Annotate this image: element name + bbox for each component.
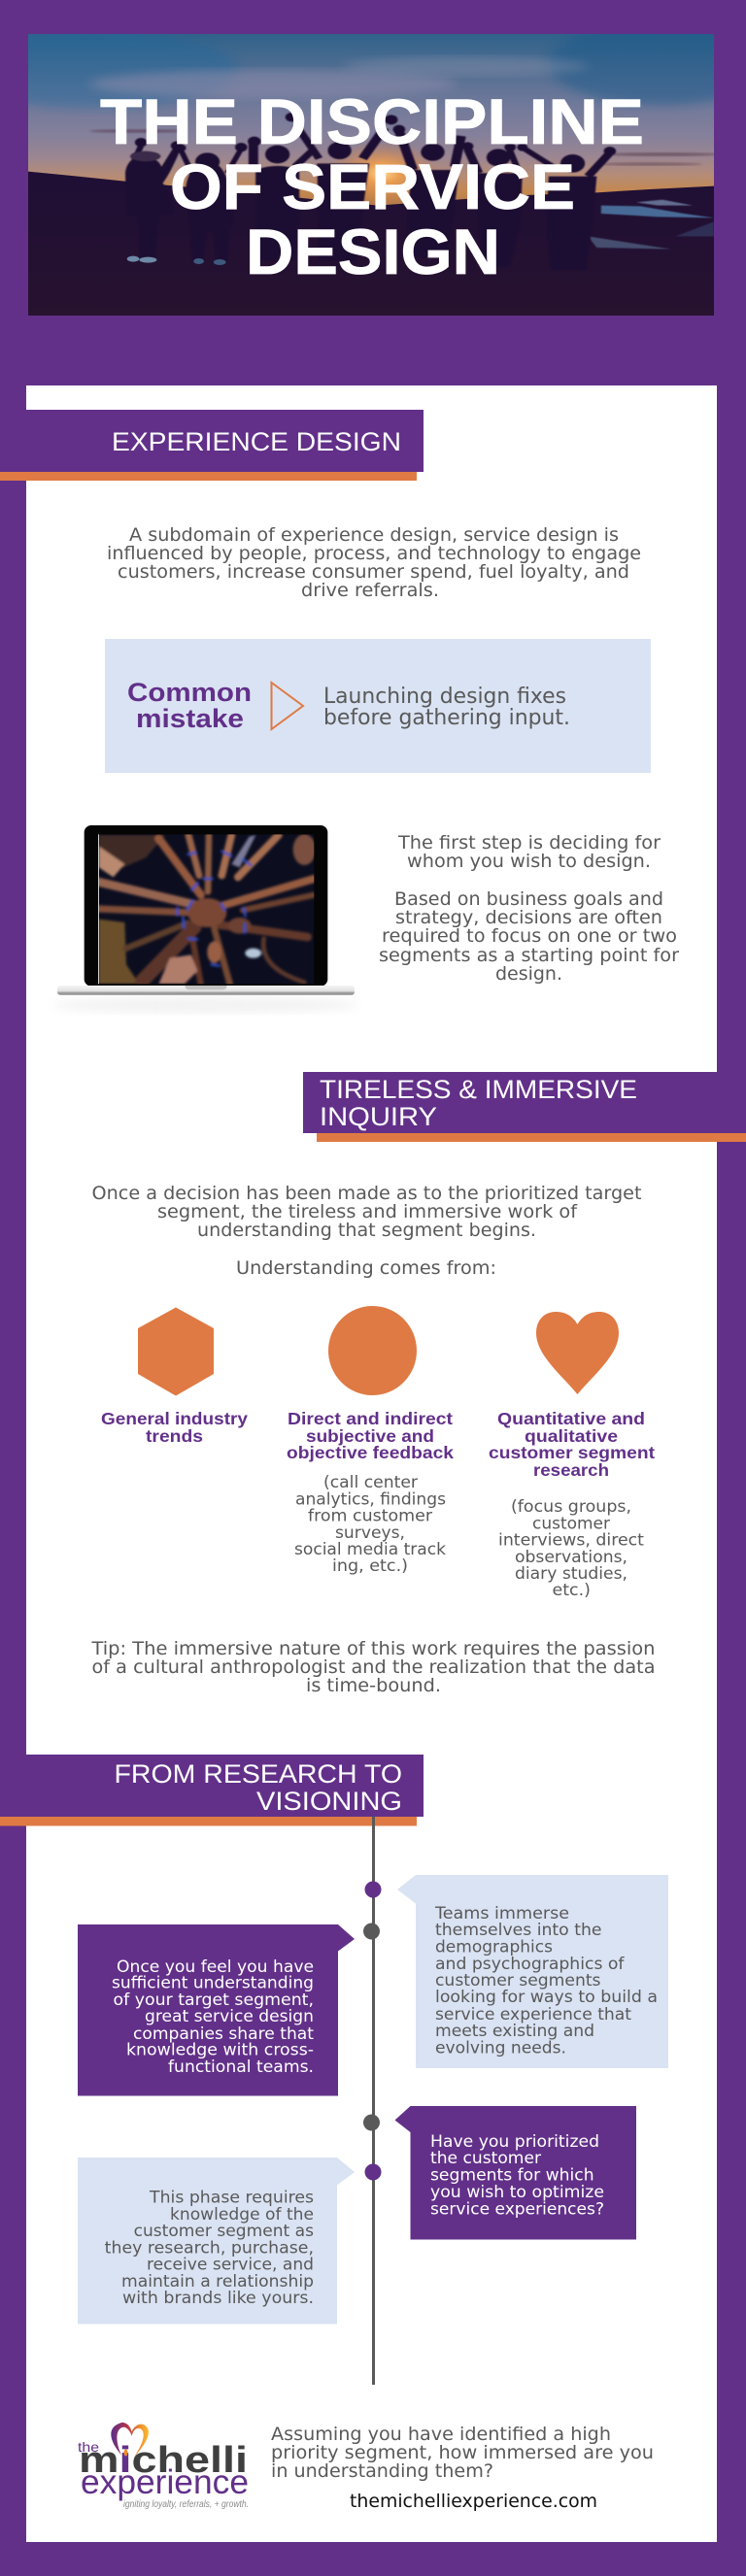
callout: share knowledge: knowledge with cross- [126, 2041, 314, 2060]
callout: teams immerse: Teams immerse [434, 1904, 569, 1924]
panel: hero photo banner [28, 34, 714, 316]
text block: tip [90, 1638, 655, 1696]
callout: prioritized segments question: Have you prioritized [430, 2132, 599, 2152]
text: feedback examples: ing, etc.) [332, 1556, 408, 1576]
logo wordmark: michelli [79, 2440, 248, 2481]
text: feedback examples: social media track [294, 1540, 446, 1559]
label: direct and indirect feedback: objective feedback [287, 1443, 454, 1462]
callout: teams immerse: demographics [435, 1938, 553, 1957]
panel: white content area [26, 385, 717, 2542]
text block: first step: The first step is deciding for [397, 832, 661, 853]
section heading: from research to visioning [0, 1755, 424, 1825]
section heading: from research to visioning: FROM RESEARCH TO [115, 1759, 402, 1789]
callout: prioritized segments question: the customer [430, 2149, 542, 2168]
section heading: tireless and immersive inquiry: TIRELESS & IMMERSIVE [320, 1075, 637, 1104]
text: research examples: customer [532, 1515, 611, 1534]
section heading: tireless and immersive inquiry: INQUIRY [320, 1102, 437, 1131]
text block: first step: design. [495, 963, 562, 985]
callout: share knowledge: sufficient understanding [112, 1973, 314, 1992]
text block: subdomain intro: A subdomain of experience design, service design is [129, 524, 619, 546]
callout: this phase requires: customer segment as [134, 2222, 314, 2241]
callout: teams immerse: service experience that [435, 2005, 631, 2024]
icon: outlined arrow triangle [272, 683, 303, 729]
callout text [323, 685, 570, 730]
text: feedback examples: surveys, [335, 1523, 405, 1543]
column: quantitative and qualitative research [489, 1312, 655, 1600]
label: general industry trends: General industry [101, 1409, 248, 1428]
label: common mistake: mistake [136, 704, 244, 733]
callout: share knowledge: great service design [145, 2007, 314, 2026]
callout: share knowledge: functional teams. [168, 2057, 314, 2077]
panel: common mistake callout [105, 639, 651, 773]
section heading: tireless and immersive inquiry [303, 1072, 746, 1142]
text: research examples [498, 1497, 644, 1600]
text block: first step: required to focus on one or two [382, 925, 677, 947]
logo wordmark: igniting loyalty, referrals, + growth. [123, 2498, 249, 2510]
title: DESIGN [246, 216, 500, 287]
text block: first step: Based on business goals and [394, 888, 663, 910]
callout: this phase requires: they research, purchase, [105, 2239, 314, 2258]
callout: prioritized segments question: service experiences? [430, 2200, 604, 2220]
callout: share knowledge [78, 1924, 355, 2095]
column: general industry trends [101, 1307, 248, 1446]
text block: subdomain intro: drive referrals. [301, 580, 439, 601]
callout: this phase requires: receive service, and [147, 2255, 314, 2274]
section heading: from research to visioning: VISIONING [256, 1787, 402, 1816]
callout: this phase requires [78, 2158, 355, 2325]
title: OF SERVICE [170, 151, 575, 222]
callout: teams immerse: and psychographics of [435, 1955, 625, 1974]
text: feedback examples: analytics, findings [295, 1489, 446, 1509]
callout: prioritized segments question [394, 2106, 636, 2239]
logo wordmark [78, 2439, 249, 2510]
label: quantitative and qualitative research: customer segment [489, 1443, 655, 1462]
icon: heart [536, 1312, 619, 1394]
label: direct and indirect feedback: Direct and indirect [288, 1409, 453, 1428]
label: quantitative and qualitative research: qualitative [525, 1426, 618, 1446]
text: research examples: observations, [515, 1548, 627, 1567]
label: quantitative and qualitative research: research [533, 1460, 609, 1480]
icon: heart outline [111, 2423, 149, 2457]
callout: teams immerse: customer segments [435, 1971, 600, 1991]
icon: hexagon [138, 1307, 214, 1396]
timeline line with dots [363, 1817, 381, 2385]
text block: tip: is time-bound. [306, 1675, 441, 1696]
logo wordmark: the [78, 2439, 99, 2455]
text block: inquiry intro: Once a decision has been made as to the prioritized target [91, 1183, 641, 1204]
text block: first step: segments as a starting point for [379, 945, 679, 966]
callout: share knowledge: Once you feel you have [117, 1957, 314, 1977]
label: general industry trends: trends [146, 1426, 203, 1446]
callout: prioritized segments question: segments for which [430, 2165, 594, 2185]
text block: subdomain intro [107, 524, 641, 601]
text: feedback examples [294, 1473, 446, 1576]
text block: closing question: in understanding them? [271, 2460, 493, 2482]
callout: teams immerse: evolving needs. [435, 2039, 566, 2058]
text block: subdomain intro: influenced by people, process, and technology to engage [107, 543, 641, 564]
callout text: before gathering input. [323, 706, 570, 730]
logo: the michelli experience [78, 2423, 249, 2510]
logo wordmark: experience [81, 2463, 249, 2501]
text block: tip: of a cultural anthropologist and the realization that the data [91, 1656, 655, 1678]
text block: closing question [271, 2424, 654, 2482]
text: research examples: diary studies, [515, 1564, 627, 1584]
label: quantitative and qualitative research: Quantitative and [497, 1409, 645, 1428]
label: quantitative and qualitative research [489, 1409, 655, 1480]
callout: this phase requires: maintain a relationship [121, 2272, 314, 2292]
section heading: experience design: EXPERIENCE DESIGN [112, 427, 401, 456]
callout: teams immerse: meets existing and [435, 2022, 594, 2041]
text block: first step: whom you wish to design. [407, 851, 651, 872]
text: research examples: interviews, direct [498, 1530, 644, 1550]
website url: themichelliexperience.com [350, 2491, 597, 2512]
label: direct and indirect feedback: subjective and [306, 1426, 434, 1446]
section heading: experience design [0, 410, 424, 481]
text block: closing question: priority segment, how immersed are you [271, 2442, 654, 2463]
text block: first step: strategy, decisions are often [395, 907, 662, 928]
callout: this phase requires: with brands like yours. [122, 2289, 314, 2308]
label: common mistake: Common [127, 678, 252, 707]
text block: subdomain intro: customers, increase consumer spend, fuel loyalty, and [118, 561, 629, 583]
text block: inquiry intro: segment, the tireless and immersive work of [157, 1201, 578, 1222]
text block: inquiry intro [91, 1183, 641, 1279]
title [100, 85, 644, 287]
callout: teams immerse: themselves into the [435, 1921, 602, 1940]
text block: tip: Tip: The immersive nature of this work requires the passion [90, 1638, 655, 1659]
text: research examples: (focus groups, [511, 1497, 631, 1517]
text: feedback examples: (call center [323, 1473, 419, 1492]
callout: share knowledge: companies share that [133, 2024, 314, 2044]
text: research examples: etc.) [552, 1581, 591, 1600]
icon: circle [328, 1306, 417, 1395]
label: general industry trends [101, 1409, 248, 1446]
column: direct and indirect feedback [287, 1306, 454, 1576]
label: direct and indirect feedback [287, 1409, 454, 1462]
title: THE DISCIPLINE [100, 85, 644, 157]
callout: this phase requires: knowledge of the [170, 2205, 314, 2225]
text block: inquiry intro: understanding that segment begins. [197, 1220, 536, 1241]
callout: this phase requires: This phase requires [149, 2189, 314, 2208]
text block: inquiry intro: Understanding comes from: [236, 1257, 496, 1279]
label: common mistake [127, 678, 252, 733]
callout text: Launching design fixes [323, 685, 566, 709]
callout: share knowledge: of your target segment, [113, 1991, 314, 2010]
laptop with hands photo [53, 825, 357, 1014]
callout: teams immerse [397, 1875, 668, 2068]
callout: teams immerse: looking for ways to build a [435, 1988, 658, 2007]
text block: first step [379, 832, 679, 985]
text: feedback examples: from customer [308, 1507, 433, 1526]
callout: prioritized segments question: you wish to optimize [430, 2183, 604, 2202]
text block: closing question: Assuming you have identified a high [271, 2424, 611, 2445]
